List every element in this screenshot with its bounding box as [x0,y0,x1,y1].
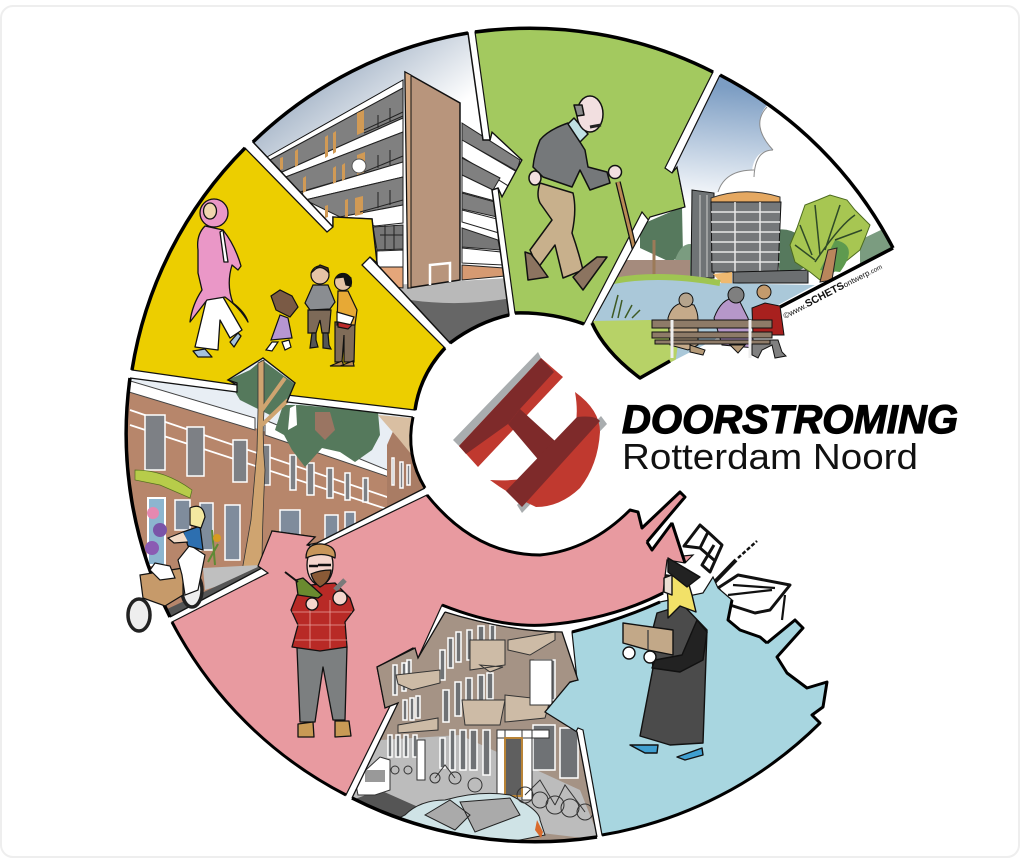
icon: graduate with box [623,558,707,760]
panel: park with seniors on a bench [590,74,894,380]
panel: apartments with bikes and car [350,612,600,850]
panel: blue graduate [545,558,827,835]
title: DOORSTROMING [622,398,958,442]
icon: seniors on bench [652,285,786,358]
panel: pink craftsman with skyline [172,492,790,795]
icon: craftsman with drill and hammer [285,544,354,737]
panel: apartment building [253,33,522,350]
icon: woman in pink [190,199,248,357]
icon: boy with grey hoodie [305,265,335,349]
subtitle: Rotterdam Noord [622,436,918,477]
skyline: crane, tower and boat [684,525,790,620]
icon: girl [266,290,298,351]
panel: yellow family [132,148,445,410]
icon: old man with cane [525,96,642,290]
icon: cyclist with cargo bike [128,506,205,631]
icon: boy with yellow shirt [330,274,357,366]
panel: brick street with tree [125,358,425,631]
copyright text: ©www.SCHETSontwerp.com [781,260,884,322]
logo: red H monogram [453,352,607,513]
panel: green senior walking [475,28,713,324]
